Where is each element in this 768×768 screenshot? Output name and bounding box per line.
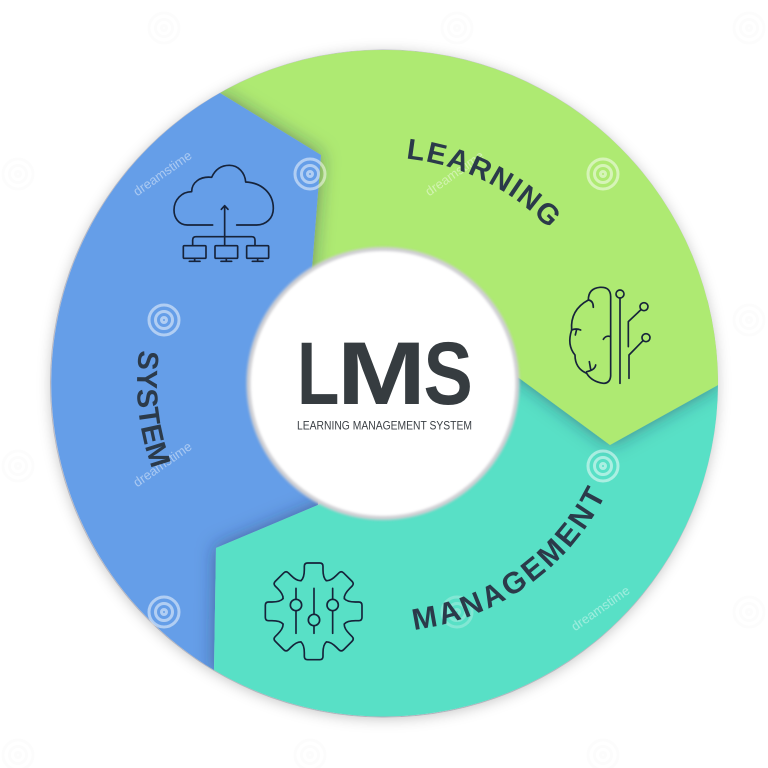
watermarks: dreamstime bbox=[568, 583, 633, 634]
panel: management segment bbox=[214, 378, 718, 717]
watermarks: dreamstime bbox=[422, 439, 487, 490]
icon: brain circuit bbox=[570, 287, 650, 383]
title: LMS: L bbox=[297, 324, 339, 423]
watermarks: dreamstime bbox=[130, 439, 195, 490]
center hub bbox=[246, 247, 520, 520]
heading: management: MANAGEMENT bbox=[412, 484, 602, 630]
panel: learning segment bbox=[220, 50, 718, 445]
watermarks: dreamstime bbox=[422, 148, 487, 199]
title: LMS bbox=[297, 323, 473, 424]
panel: system segment bbox=[51, 93, 321, 670]
title: LMS: M bbox=[337, 323, 426, 423]
heading: learning: LEARNING bbox=[408, 138, 559, 226]
subtitle: LEARNING MANAGEMENT SYSTEM bbox=[297, 420, 472, 432]
heading: system: SYSTEM bbox=[137, 351, 170, 468]
icon: gear with sliders bbox=[265, 563, 362, 660]
ring shadow bbox=[51, 50, 717, 716]
donut segments bbox=[51, 50, 718, 717]
icon: cloud network bbox=[174, 165, 273, 261]
title: LMS: S bbox=[424, 325, 473, 424]
watermarks: dreamstime bbox=[130, 148, 195, 199]
learning segment overlap bbox=[518, 300, 718, 454]
